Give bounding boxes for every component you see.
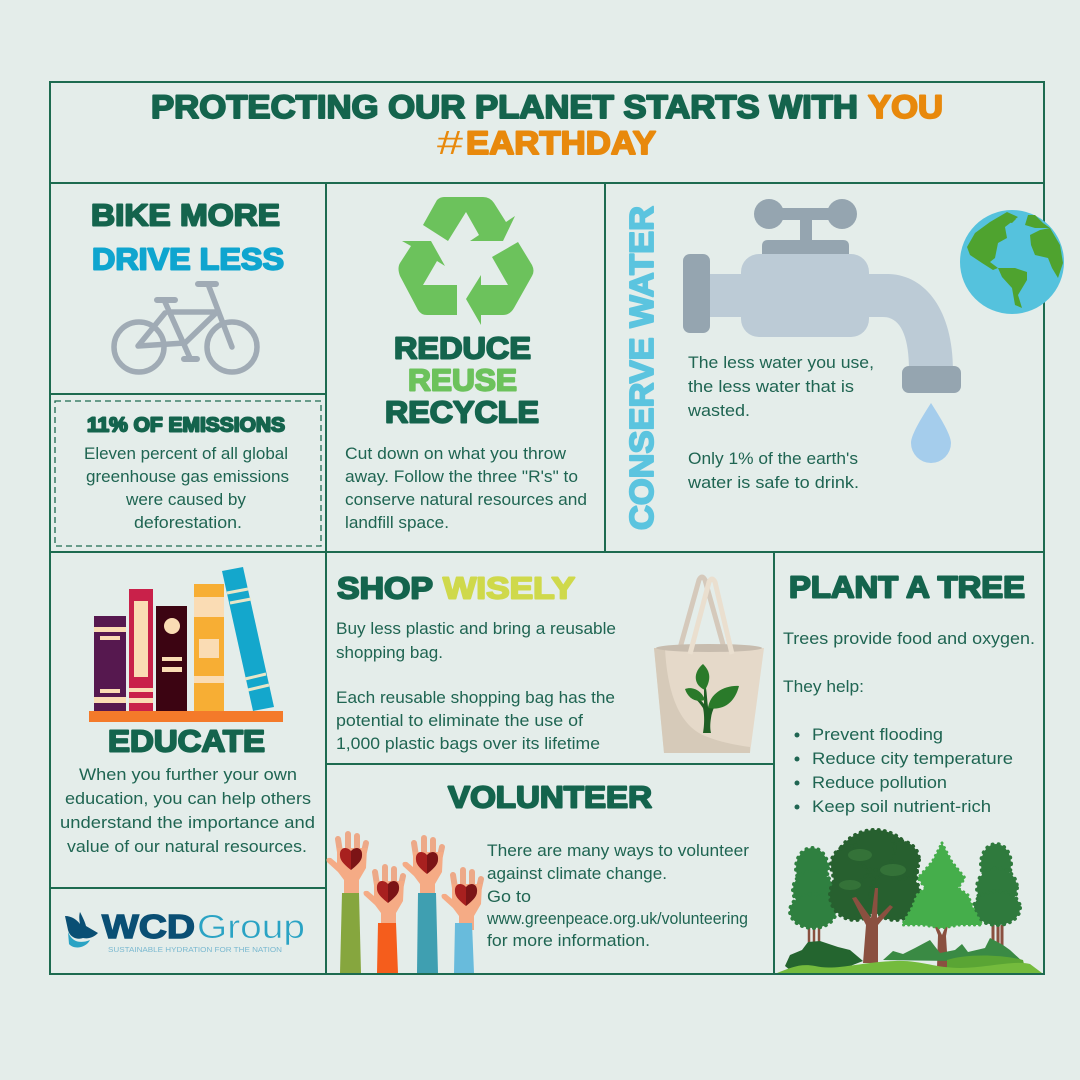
heading: shop: SHOP (337, 572, 433, 606)
icon: bicycle (114, 284, 257, 372)
tree benefits list: Reduce city temperature (812, 750, 1013, 768)
icon: books on shelf (89, 567, 283, 722)
water body text: water is safe to drink. (687, 474, 859, 492)
panel: emissions statistic (50, 394, 326, 552)
shop body text: potential to eliminate the use of (336, 712, 583, 730)
emissions body text: greenhouse gas emissions (86, 468, 289, 486)
logo wordmark: WCD: WCD (102, 908, 195, 945)
panel: WCD Group logo (50, 888, 326, 974)
illustration: trees on a hill (777, 830, 1042, 973)
recycling body text (345, 445, 587, 532)
educate body text: When you further your own (79, 766, 297, 784)
icon: water drop (911, 403, 951, 463)
logo tagline: SUSTAINABLE HYDRATION FOR THE NATION (108, 947, 282, 954)
heading: 11% of emissions: 11% OF EMISSIONS (87, 414, 285, 436)
water body text (687, 354, 874, 492)
tree benefits list: Prevent flooding (812, 726, 943, 744)
heading: drive less: DRIVE LESS (92, 242, 284, 276)
panel: plant a tree (774, 552, 1044, 974)
tree intro text: They help: (783, 678, 864, 696)
shop body text (336, 620, 616, 753)
panel: shop wisely (326, 552, 774, 764)
recycling body text: Cut down on what you throw (345, 445, 566, 463)
water body text: wasted. (687, 402, 750, 420)
icon: water tap (683, 199, 961, 393)
title line 2: hashtag: # (437, 124, 464, 161)
heading: recycle: RECYCLE (385, 396, 539, 430)
heading: plant a tree: PLANT A TREE (789, 570, 1025, 604)
logo wordmark: Group: Group (197, 908, 305, 945)
heading: reduce: REDUCE (394, 332, 531, 366)
tree intro text: Trees provide food and oxygen. (783, 630, 1035, 648)
volunteer body text: www.greenpeace.org.uk/volunteering (486, 910, 748, 928)
volunteer body text (486, 842, 750, 950)
volunteer body text: Go to (487, 888, 531, 906)
educate body text: understand the importance and (60, 814, 315, 832)
recycling body text: away. Follow the three "R's" to (345, 468, 578, 486)
educate body text (60, 766, 315, 856)
educate body text: education, you can help others (65, 790, 311, 808)
volunteer body text: There are many ways to volunteer (487, 842, 750, 860)
panel: conserve water (605, 183, 1064, 552)
emissions body text: were caused by (125, 491, 247, 509)
vertical heading: conserve water: CONSERVE WATER (623, 206, 660, 530)
volunteer body text: for more information. (487, 932, 650, 950)
tree benefits list: Keep soil nutrient-rich (812, 798, 991, 816)
heading: volunteer: VOLUNTEER (448, 780, 652, 814)
panel: educate (50, 552, 326, 888)
icon: reusable tote bag (654, 577, 764, 753)
title line 2: earth day: EARTHDAY (466, 125, 656, 161)
panel: title (50, 82, 1044, 183)
emissions body text: Eleven percent of all global (84, 445, 288, 463)
shop body text: shopping bag. (336, 644, 443, 662)
shop body text: Buy less plastic and bring a reusable (336, 620, 616, 638)
icon: raised hands holding hearts (326, 834, 482, 973)
recycling body text: conserve natural resources and (345, 491, 587, 509)
emissions body text: deforestation. (134, 514, 242, 532)
recycling body text: landfill space. (345, 514, 449, 532)
emissions body text (84, 445, 289, 532)
volunteer body text: against climate change. (487, 865, 667, 883)
heading: reuse: REUSE (408, 364, 517, 398)
panel: bike more drive less (50, 183, 326, 394)
title highlight: you: YOU (868, 89, 943, 125)
panel: reduce reuse recycle (326, 183, 605, 552)
tree benefits list: Reduce pollution (812, 774, 947, 792)
icon: earth globe (960, 210, 1064, 314)
title line 1: PROTECTING OUR PLANET STARTS WITH (151, 89, 858, 125)
water body text: Only 1% of the earth's (688, 450, 858, 468)
panel: volunteer (326, 764, 774, 974)
tree benefits list (794, 726, 1013, 816)
heading: educate: EDUCATE (108, 724, 265, 758)
icon: recycling arrows (398, 197, 534, 325)
icon: butterfly logo mark (65, 912, 98, 947)
heading: wisely: WISELY (443, 572, 575, 606)
shop body text: 1,000 plastic bags over its lifetime (336, 735, 600, 753)
water body text: the less water that is (688, 378, 854, 396)
educate body text: value of our natural resources. (67, 838, 307, 856)
shop body text: Each reusable shopping bag has the (336, 689, 615, 707)
heading: bike more: BIKE MORE (91, 198, 280, 232)
tree intro text (783, 630, 1035, 696)
water body text: The less water you use, (688, 354, 874, 372)
